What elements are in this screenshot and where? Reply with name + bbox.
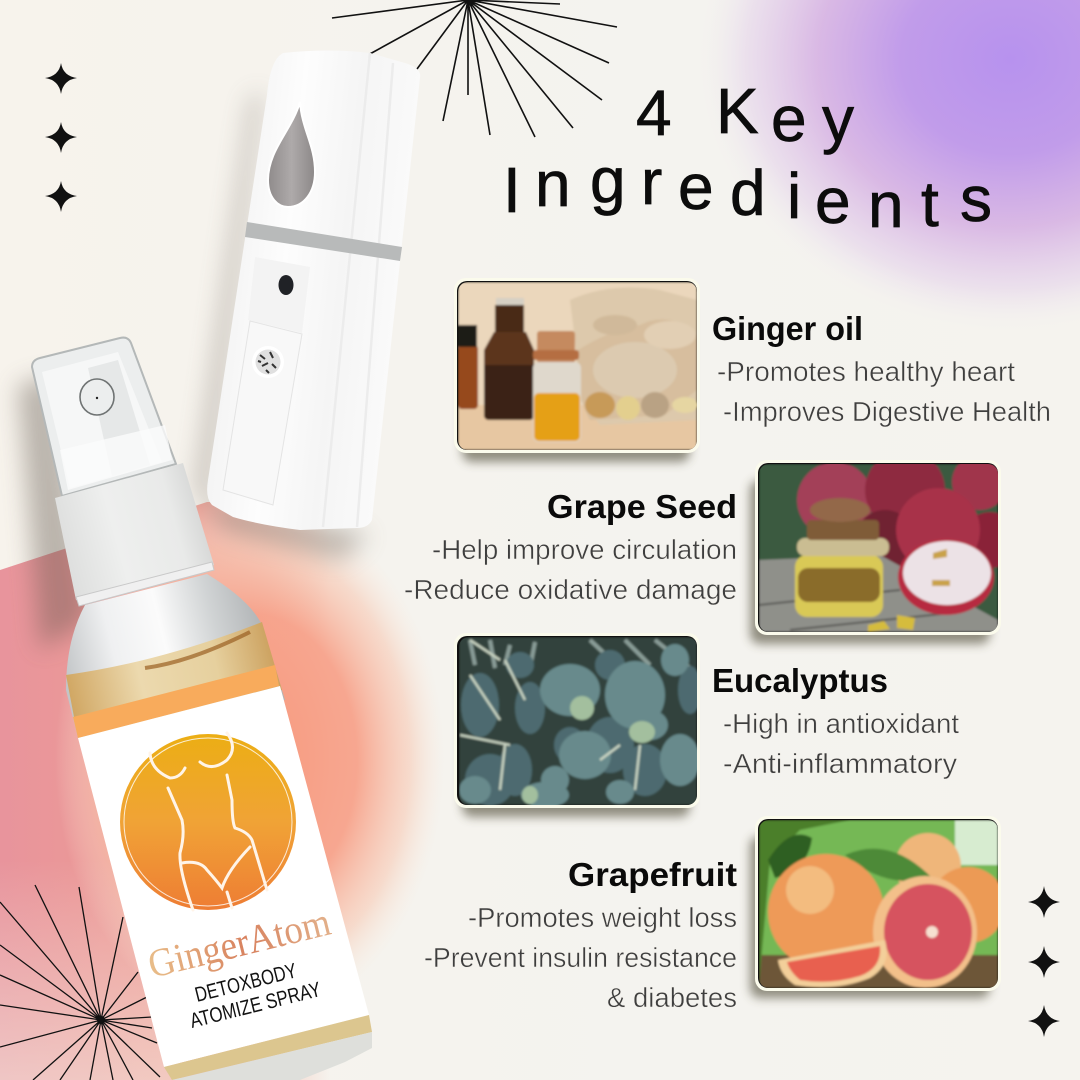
sunburst top [332,0,617,137]
bottle glass shoulder [66,574,285,738]
liquid [66,622,282,738]
silver ring [245,222,402,261]
spray bottle [18,338,372,1080]
gem button [252,346,284,378]
sparkles bottom right [1028,886,1060,1037]
lower liquid and glass base [164,1015,372,1080]
panel: eucalyptus [454,633,702,817]
text: grape seed: Grape Seed [547,488,737,525]
photo: grapefruit halves [759,820,1006,988]
text: eucalyptus: Eucalyptus [712,662,888,699]
title: 4 Key [636,75,854,155]
text: ginger oil: -Improves Digestive Health [723,396,1051,427]
text: ginger oil [712,310,1051,427]
icon: water drop window [268,102,315,207]
photo: eucalyptus leaves [459,637,702,808]
clear cap [32,338,176,496]
text: grape seed: -Reduce oxidative damage [404,574,737,605]
text: grapefruit: Grapefruit [568,856,737,893]
text: grapefruit: -Promotes weight loss [468,902,737,933]
text: grapefruit [424,856,737,1013]
photo: ginger and oil bottles [458,282,698,450]
slider panel [223,321,302,505]
white mist sprayer [195,50,420,560]
title: Ingredients [503,144,992,241]
text: ginger oil: -Promotes healthy heart [717,356,1015,387]
nozzle hole [278,275,294,295]
panel: grape seed [750,450,1018,644]
text: grapefruit: -Prevent insulin resistance [424,942,737,973]
sunburst bottom left [0,885,160,1080]
text: grape seed: -Help improve circulation [432,534,737,565]
text: eucalyptus: -Anti-inflammatory [723,748,957,779]
text: grape seed [404,488,737,605]
brand name: GingerAtom [143,899,335,987]
photo: grapes and oil jar [759,464,998,632]
logo circle with body outline [120,733,296,910]
product name: ATOMIZE SPRAY [188,978,323,1033]
orange label band [73,665,279,738]
label [78,686,369,1067]
sparkles top left [45,63,77,212]
panel: grapefruit [750,816,1006,998]
product name: DETOXBODY [193,959,299,1007]
text: eucalyptus [712,662,959,779]
spray collar [55,463,214,600]
text: ginger oil: Ginger oil [712,310,863,347]
text: eucalyptus: -High in antioxidant [723,708,959,739]
text: grapefruit: & diabetes [607,982,737,1013]
panel: ginger oil [454,278,700,462]
sprayer nozzle panel [248,257,310,333]
title [503,75,992,241]
